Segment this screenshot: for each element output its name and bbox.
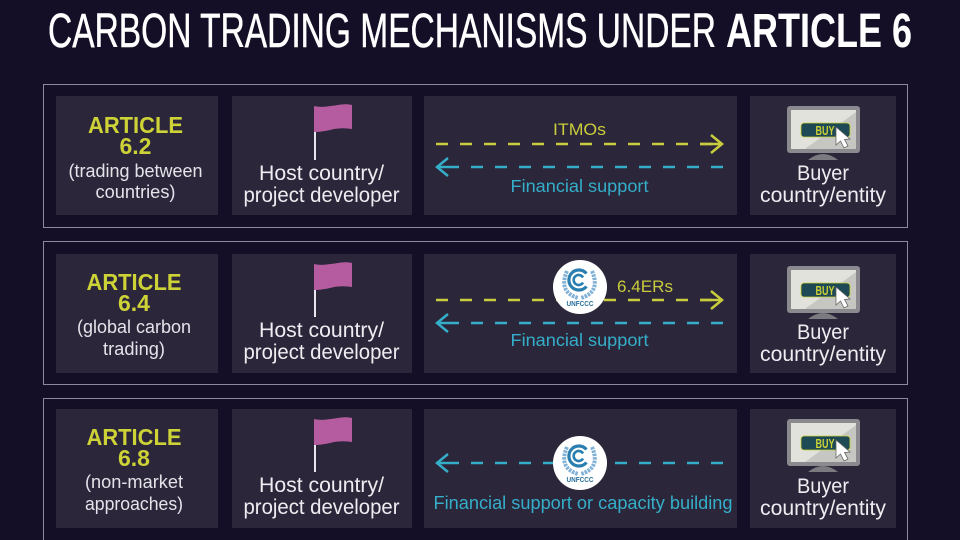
icon: flag (314, 417, 352, 472)
card: buyer (750, 409, 896, 528)
panel: article 6.8 row (44, 398, 908, 540)
icon: UNFCCC logo: UNFCCC (566, 299, 594, 308)
arrow: financial support (437, 158, 723, 176)
card: host country: Host country/ (259, 474, 384, 497)
icon: monitor buy (787, 266, 860, 319)
card: article 6.2 label: countries) (96, 181, 176, 202)
card: flows (424, 254, 737, 373)
card: host country (232, 96, 412, 215)
card: article 6.8 label: ARTICLE (86, 424, 182, 450)
icon: monitor buy: BUY (816, 284, 835, 298)
icon: flag (314, 104, 352, 160)
card: buyer: country/entity (760, 343, 886, 366)
card: host country: Host country/ (259, 319, 384, 342)
card: flows (424, 96, 737, 215)
card: article 6.2 label: ARTICLE (88, 112, 183, 138)
icon: UNFCCC logo (553, 436, 607, 490)
card: article 6.4 label: trading) (103, 338, 165, 359)
icon: monitor buy: BUY (816, 437, 835, 451)
card: article 6.8 label: 6.8 (118, 445, 150, 471)
card: article 6.8 label (56, 409, 218, 528)
card: article 6.4 label: 6.4 (118, 290, 150, 316)
panel: article 6.2 row (44, 84, 908, 228)
card: buyer: Buyer (797, 162, 849, 185)
card: buyer: Buyer (797, 321, 849, 344)
card: article 6.8 label: approaches) (85, 493, 183, 514)
card: article 6.2 label: (trading between (68, 160, 202, 181)
card: buyer (750, 254, 896, 373)
card: article 6.4 label: (global carbon (77, 316, 191, 337)
card: buyer (750, 96, 896, 215)
arrow: 6.4ERs (436, 291, 722, 309)
card: host country (232, 254, 412, 373)
card: buyer: country/entity (760, 184, 886, 207)
icon: UNFCCC logo (553, 260, 607, 314)
card: host country: project developer (244, 341, 400, 364)
arrow: financial support (437, 314, 723, 332)
card: buyer: Buyer (797, 475, 849, 498)
card: article 6.4 label: ARTICLE (86, 269, 182, 295)
card: buyer: country/entity (760, 497, 886, 520)
icon: UNFCCC logo: UNFCCC (566, 475, 594, 484)
icon: flag (314, 262, 352, 317)
icon: monitor buy (787, 106, 860, 160)
card: flows: ITMOs (553, 120, 606, 139)
card: flows: Financial support (510, 330, 649, 350)
card: flows: 6.4ERs (617, 277, 673, 296)
card: article 6.8 label: (non-market (85, 471, 183, 492)
card: article 6.2 label: 6.2 (120, 133, 151, 159)
card: flows: Financial support (510, 176, 649, 196)
arrow: ITMOs (436, 135, 722, 153)
card: host country: project developer (244, 496, 400, 519)
panel: article 6.4 row (44, 242, 908, 384)
card: flows (424, 409, 737, 528)
card: article 6.2 label (56, 96, 218, 215)
card: host country (232, 409, 412, 528)
card: host country: Host country/ (259, 162, 384, 185)
card: article 6.4 label (56, 254, 218, 373)
icon: monitor buy (787, 419, 860, 472)
card: host country: project developer (244, 184, 400, 207)
arrow: financial support (437, 454, 723, 472)
card: flows: Financial support or capacity building (434, 493, 732, 513)
icon: monitor buy: BUY (816, 124, 835, 138)
